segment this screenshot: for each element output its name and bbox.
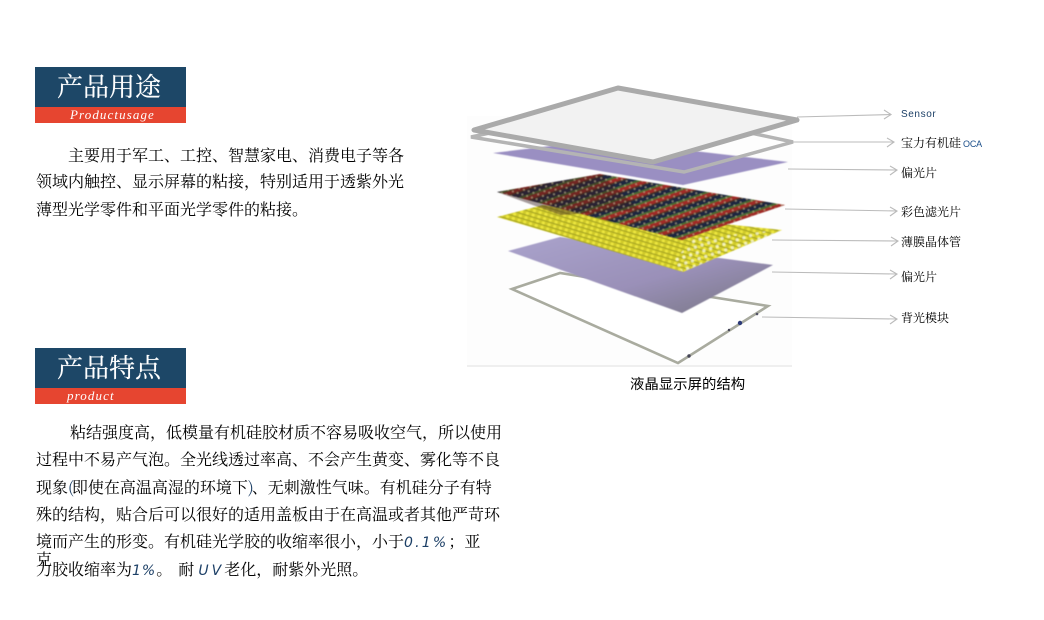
heading badge: 产品用途: 产品用途 xyxy=(57,73,161,102)
text block: product features: 克 xyxy=(36,547,52,570)
label: colour filter: 彩色滤光片 xyxy=(901,203,961,220)
layer: lower polarizer xyxy=(508,237,773,313)
arrow: sensor xyxy=(797,110,891,119)
heading badge: 产品用途 xyxy=(35,67,186,123)
layer: thin film transistor xyxy=(497,205,782,272)
label: backlight module: 背光模块 xyxy=(901,309,949,326)
layer: sensor xyxy=(474,88,797,162)
text block: product features: 粘结强度高，低模量有机硅胶材质不容易吸收空气，所以使用 xyxy=(70,420,502,443)
label: OCA: 宝力有机硅OCA xyxy=(901,134,982,151)
text block: product features: 力胶收缩率为1%。 耐 UV老化，耐紫外光照。 xyxy=(36,557,368,580)
heading badge: 产品特点 xyxy=(35,348,186,404)
heading badge: 产品特点: 产品特点 xyxy=(57,354,161,383)
caption: LCD structure: 液晶显示屏的结构 xyxy=(630,373,745,394)
text block: product usage: 领域内触控、显示屏幕的粘接，特别适用于透紫外光 xyxy=(36,169,404,192)
heading badge: 产品特点: product xyxy=(67,388,115,403)
layer: upper polarizer xyxy=(493,140,788,185)
layer: OCA frame xyxy=(471,105,793,172)
text block: product features: 现象(即使在高温高湿的环境下)、无刺激性气味。有机硅分子有特 xyxy=(36,475,492,498)
arrow: lower polarizer xyxy=(772,270,897,279)
text block: product features: 境而产生的形变。有机硅光学胶的收缩率很小，小于0.1%；亚 xyxy=(36,529,480,552)
text block: product usage: 主要用于军工、工控、智慧家电、消费电子等各 xyxy=(68,143,404,166)
text block: product features: 过程中不易产气泡。全光线透过率高、不会产生黄变、雾化等不良 xyxy=(36,447,500,470)
heading badge: 产品用途: Productusage xyxy=(70,107,155,122)
arrow: colour filter xyxy=(785,207,897,216)
label: upper polarizer: 偏光片 xyxy=(901,164,937,181)
arrow: thin film transistor xyxy=(772,237,898,246)
image backdrop xyxy=(467,116,792,367)
label: Sensor: Sensor xyxy=(901,109,936,120)
text block: product features xyxy=(36,420,502,580)
layer: backlight module xyxy=(512,273,768,363)
arrow: backlight module xyxy=(762,315,897,324)
label: lower polarizer: 偏光片 xyxy=(901,268,937,285)
text block: product usage xyxy=(36,143,404,220)
layer: colour filter xyxy=(497,174,785,240)
label: thin film transistor: 薄膜晶体管 xyxy=(901,233,961,250)
arrow: OCA xyxy=(793,138,894,147)
arrow: upper polarizer xyxy=(788,166,897,175)
text block: product usage: 薄型光学零件和平面光学零件的粘接。 xyxy=(36,197,308,220)
text block: product features: 殊的结构，贴合后可以很好的适用盖板由于在高温或者其他严苛环 xyxy=(36,502,500,525)
